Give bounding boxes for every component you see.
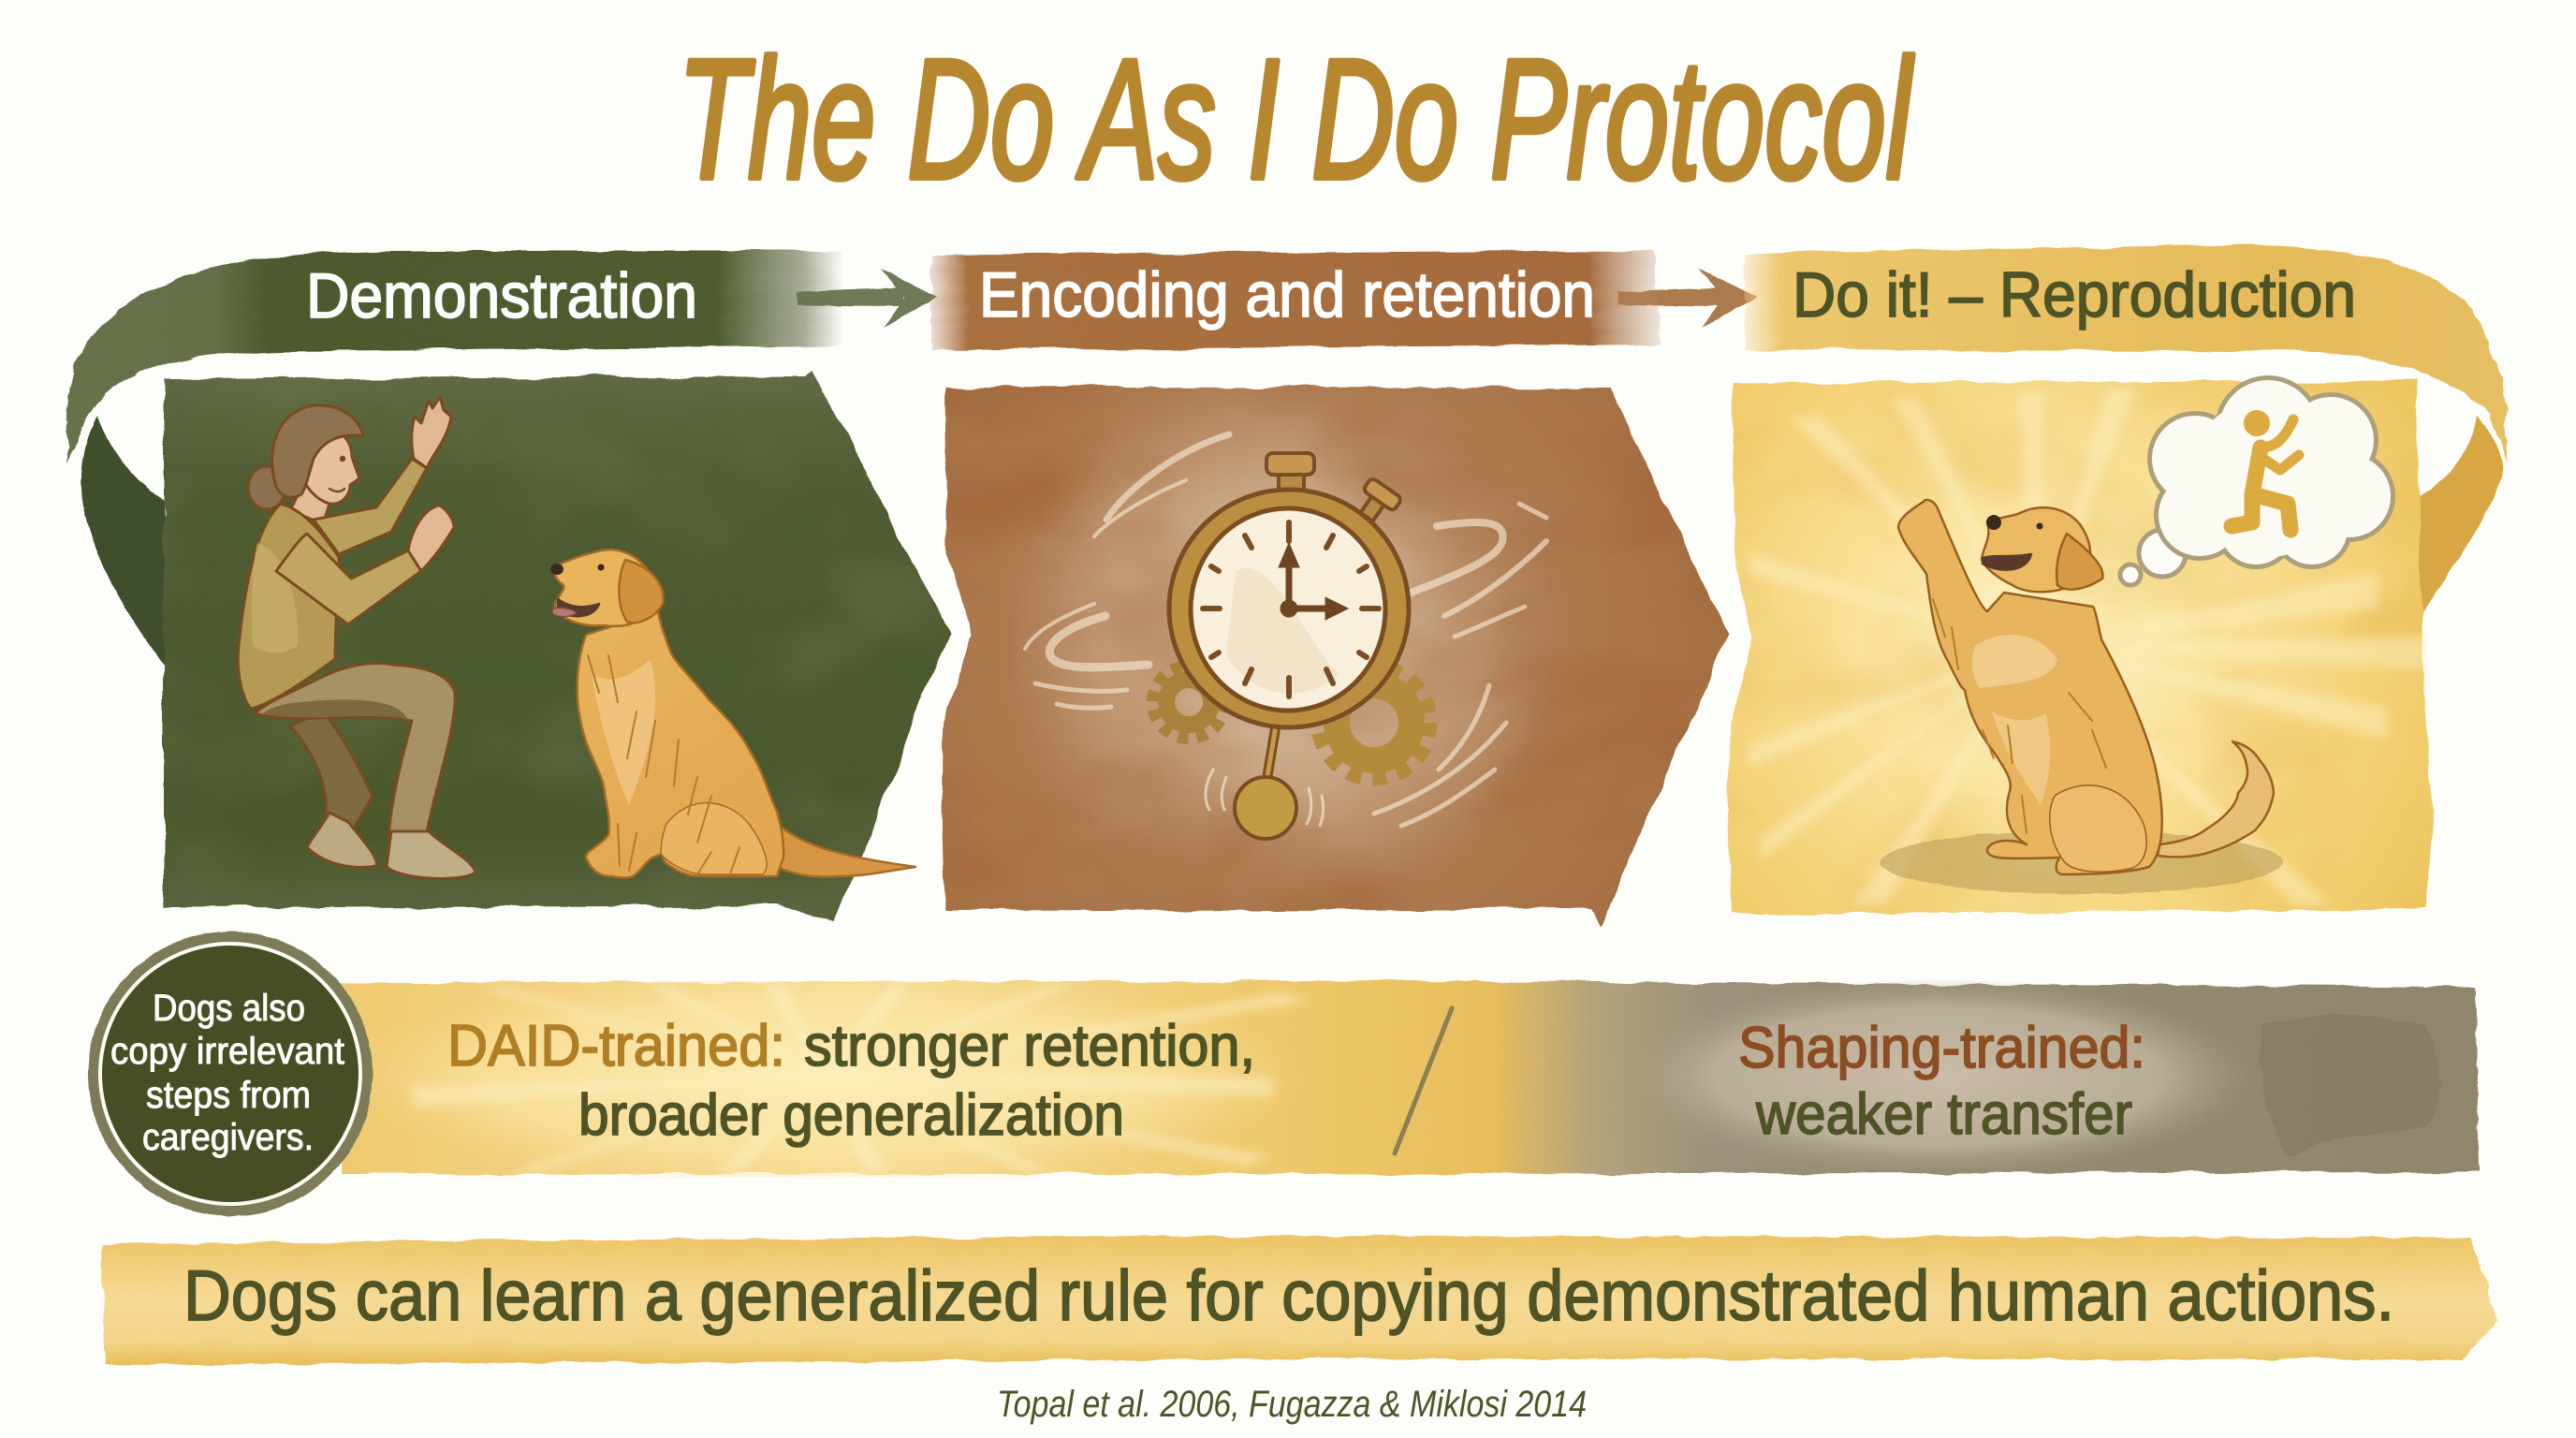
clock hands [1279, 543, 1348, 620]
citation: Topal et al. 2006, Fugazza & Miklosi 2014 [997, 1384, 1587, 1425]
dog tail [777, 824, 915, 877]
side button [1352, 477, 1402, 528]
eye and smile [329, 457, 344, 492]
icon: clock with gears and pendulum [1153, 453, 1430, 839]
shaping text: Shaping-trained: [1738, 1016, 2145, 1080]
dog head [1982, 507, 2090, 592]
clock face [1191, 508, 1385, 711]
panel: demonstration [81, 371, 950, 922]
motion swooshes [1025, 434, 1546, 826]
illustration: dog begging [1898, 500, 2274, 874]
illustration: woman squatting with raised hands [238, 397, 476, 878]
DAID rays [412, 985, 1310, 1172]
comparison bar [340, 979, 2480, 1178]
yellow ribbon [1745, 245, 2508, 463]
ribbon tail: green [81, 416, 174, 679]
raised hand [412, 397, 451, 468]
shoulder highlight [1972, 635, 2057, 688]
dog body [578, 611, 783, 878]
thigh shadow [262, 699, 407, 719]
DAID text: stronger retention, [804, 1014, 1255, 1078]
thought cloud [2152, 380, 2391, 565]
DAID text: broader generalization [578, 1083, 1124, 1148]
front shoe [387, 831, 476, 878]
dog haunch [661, 803, 767, 874]
lit sweater patch [252, 543, 298, 653]
right gear [1318, 667, 1430, 779]
panel: encoding and retention [942, 386, 1729, 927]
title: The Do As I Do Protocol [678, 23, 1914, 214]
neck [290, 482, 329, 524]
callout: circle note: copy irrelevant [110, 1031, 344, 1072]
green watercolor panel [164, 371, 950, 922]
brown banner stroke [931, 251, 1661, 350]
callout: circle note: caregivers. [142, 1117, 314, 1158]
dog ear [619, 560, 664, 623]
ribbon tail: yellow [2406, 416, 2503, 646]
callout: circle note [88, 932, 373, 1216]
callout: circle note: steps from [146, 1075, 311, 1116]
arrow: demonstration to encoding [798, 269, 937, 328]
lower sleeve [276, 534, 421, 624]
banner label: Demonstration [306, 260, 697, 331]
dog mouth and tongue [558, 599, 599, 616]
bar wash [341, 981, 2479, 1174]
yellow watercolor panel [1729, 380, 2433, 914]
dog mouth [1983, 554, 2031, 570]
hair bun [248, 466, 285, 509]
dog fur strokes [1933, 599, 2106, 833]
DAID text: DAID-trained: [447, 1014, 785, 1078]
thought bubbles [2120, 530, 2186, 585]
clock ticks [1203, 522, 1379, 697]
dog fur strokes [588, 655, 739, 874]
DAID glow [389, 981, 1262, 1178]
dog head [554, 550, 658, 626]
dog chest fur [592, 660, 655, 805]
brown watercolor panel [942, 386, 1729, 927]
haunch highlight [2050, 785, 2146, 872]
face tint [1226, 568, 1339, 693]
panel: reproduction [1729, 380, 2503, 914]
crown knob [1266, 453, 1314, 475]
arrow: encoding to reproduction [1617, 269, 1758, 328]
icon: kneeling figure [2232, 412, 2299, 530]
lower hand [408, 506, 454, 571]
pendulum motion marks [1206, 770, 1324, 826]
back shoe [307, 813, 376, 867]
dog tail [2158, 741, 2274, 857]
clock case [1169, 490, 1409, 727]
banner label: Do it! – Reproduction [1793, 259, 2356, 330]
takeaway banner [101, 1236, 2497, 1365]
banner: demonstration [66, 251, 842, 463]
callout: circle note: Dogs also [153, 988, 305, 1029]
dog nose and eye [1986, 515, 2042, 530]
back leg [290, 712, 373, 838]
pendulum bob [1235, 777, 1296, 839]
dog nose and eye [550, 564, 605, 575]
divider slash [1395, 1008, 1452, 1153]
banner: encoding and retention [931, 251, 1661, 350]
dog ear [2056, 534, 2102, 590]
shadow under dog [1881, 830, 2283, 894]
banner: reproduction [1745, 245, 2508, 463]
belly fur [1992, 712, 2050, 805]
face [301, 432, 359, 504]
front leg and thigh [255, 663, 455, 838]
takeaway banner: Dogs can learn a generalized rule for copying demonstrated human actions. [183, 1256, 2394, 1336]
grey glow [1619, 978, 2256, 1175]
pendulum rod [1266, 726, 1276, 782]
raised sleeve [314, 459, 427, 554]
sunburst rays [1749, 389, 2424, 904]
crown stem [1279, 468, 1304, 492]
torso sweater [238, 504, 339, 709]
shaping text: weaker transfer [1755, 1082, 2132, 1147]
hair [272, 405, 363, 497]
DAID text [447, 1014, 1255, 1148]
illustration: seated golden retriever [550, 550, 915, 878]
ribbon: green [66, 251, 842, 463]
left gear [1153, 667, 1224, 738]
grey dark patch [2261, 1015, 2439, 1156]
dog body [1898, 500, 2162, 874]
shaping text [1738, 1016, 2145, 1147]
banner label: Encoding and retention [979, 259, 1595, 330]
